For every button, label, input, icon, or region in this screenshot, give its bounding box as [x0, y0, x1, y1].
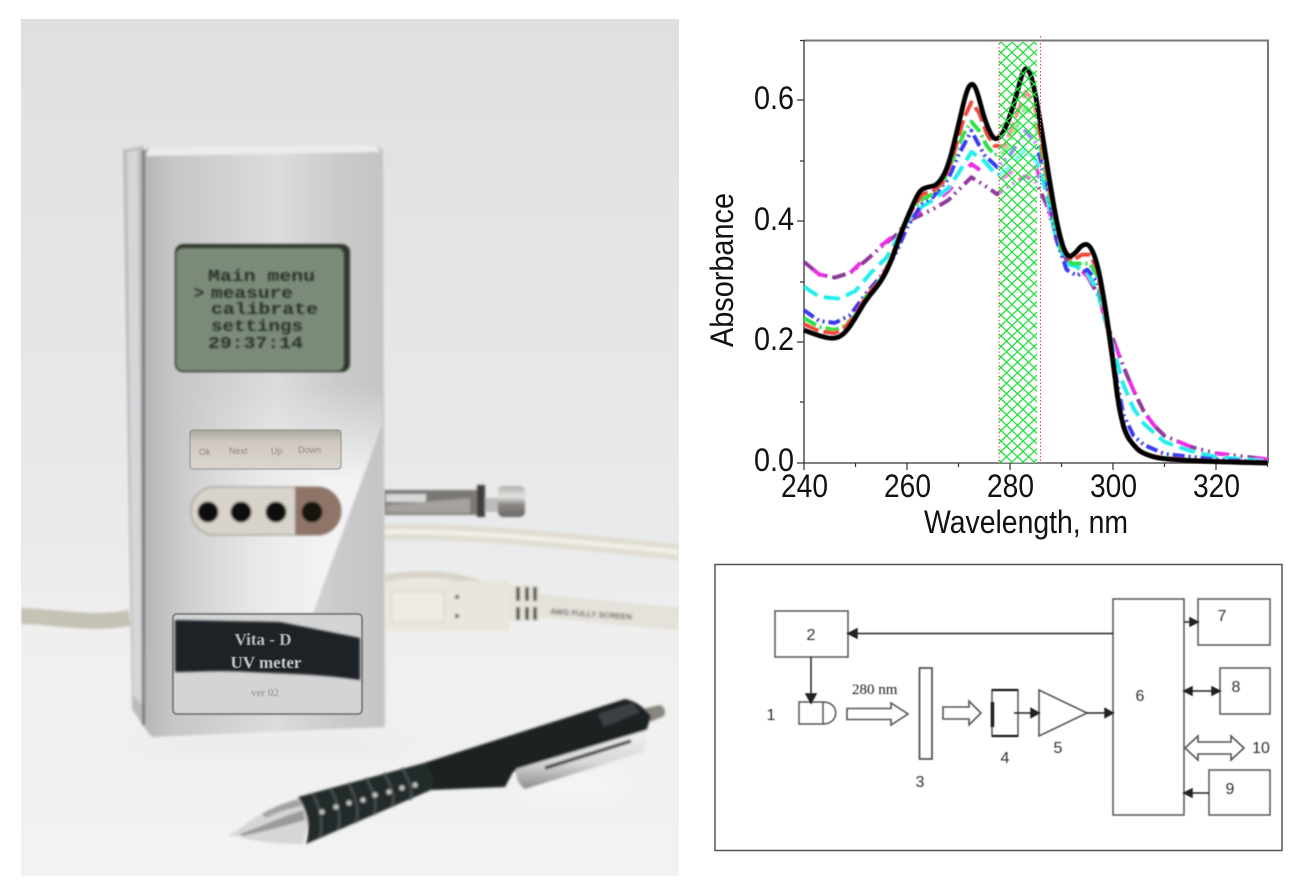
pen: [228, 699, 665, 844]
probe cable: [380, 532, 679, 552]
y axis labels: [754, 80, 794, 478]
x axis labels: 320: [1193, 468, 1240, 504]
curve: black: [804, 69, 1268, 463]
curve: red: [804, 92, 1268, 463]
diagram labels: 280 nm: [852, 682, 898, 698]
LCD screen: 29:37:14: [208, 335, 303, 354]
x axis labels: 300: [1090, 468, 1137, 504]
LCD screen: calibrate: [211, 301, 318, 320]
front face: [142, 145, 385, 737]
curve: blue: [804, 131, 1268, 462]
panel: block diagram: [715, 564, 1282, 850]
diagram labels: 1: [767, 707, 776, 724]
diagram labels: 7: [1218, 608, 1227, 625]
diagonal highlight: [206, 402, 382, 613]
USB connector and cable: AWG FULLY SCREEN: [550, 607, 632, 622]
x axis title: Wavelength, nm: [924, 504, 1128, 540]
name plate: Vita - D: [235, 630, 291, 649]
connection arrows: [806, 618, 1220, 797]
x axis labels: [781, 468, 1240, 504]
LCD screen: >: [194, 285, 204, 304]
diagram labels: 8: [1232, 679, 1241, 696]
x axis labels: 260: [884, 468, 931, 504]
button label plate: Next: [229, 446, 248, 456]
plot frame: [797, 40, 1268, 470]
green hatched 280 nm band: [999, 36, 1040, 463]
probe: [384, 485, 525, 517]
name plate: [173, 614, 362, 714]
x axis labels: 280: [987, 468, 1034, 504]
diagram labels: 3: [916, 774, 925, 791]
diagram labels: 10: [1252, 740, 1270, 757]
panel: device photograph: [21, 19, 679, 876]
diagram labels: 6: [1136, 688, 1145, 705]
y axis labels: 0.0: [754, 442, 794, 478]
button label plate: Ok: [199, 447, 211, 457]
curve: cyan: [804, 149, 1268, 461]
curve: green: [804, 107, 1268, 463]
LCD screen: [175, 244, 350, 372]
chart: absorbance spectrum: [704, 36, 1268, 540]
diagram labels: 2: [807, 627, 816, 644]
left table cable: [21, 616, 130, 621]
y axis labels: 0.6: [754, 80, 794, 116]
button label plate: [190, 430, 341, 469]
diagram labels: 4: [1001, 750, 1010, 767]
curve: purple: [804, 176, 1268, 459]
diagram labels: 5: [1054, 740, 1063, 757]
button label plate: Down: [298, 445, 321, 455]
coloured spectrum curves: [804, 92, 1268, 463]
pen clip: [516, 730, 647, 789]
diagram labels: [767, 608, 1270, 798]
y axis title: Absorbance: [704, 193, 740, 347]
LCD screen: settings: [211, 318, 303, 337]
LCD screen: measure: [211, 285, 293, 304]
x axis labels: 240: [781, 468, 828, 504]
name plate: ver 02: [251, 687, 279, 699]
push buttons: [191, 487, 341, 535]
LCD screen: Main menu: [208, 268, 315, 287]
side face: [123, 146, 150, 736]
button label plate: Up: [271, 446, 283, 456]
curve: magenta: [804, 161, 1268, 459]
y axis labels: 0.2: [754, 321, 794, 357]
diagram labels: 9: [1226, 781, 1235, 798]
name plate: UV meter: [231, 653, 302, 672]
meter body: [123, 145, 385, 737]
y axis labels: 0.4: [754, 201, 794, 237]
USB connector and cable: [385, 575, 679, 631]
